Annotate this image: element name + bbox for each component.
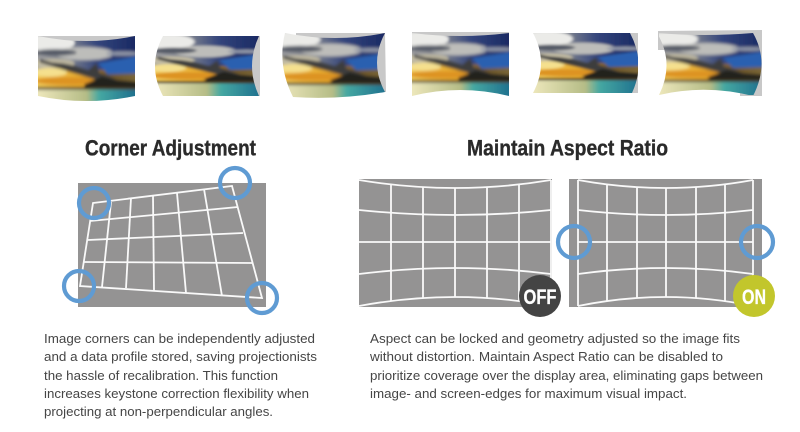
thumbnail: pincushion with bulge — [282, 33, 386, 98]
text: maintain aspect ratio description: Aspect can be locked and geometry adjusted so the image fits — [370, 331, 741, 346]
thumbnail: side curve — [155, 36, 260, 96]
text: corner adjustment description — [44, 331, 318, 419]
text: corner adjustment description: projecting at non-perpendicular angles. — [44, 404, 273, 419]
text: maintain aspect ratio description: prioritize coverage over the display area, eliminating gaps between — [370, 368, 763, 383]
text: corner adjustment description: the hassle of recalibration. This function — [44, 368, 278, 383]
panel: aspect ratio on diagram — [558, 179, 775, 317]
thumbnail: warped — [658, 30, 762, 96]
thumbnail: bottom arch — [412, 32, 509, 96]
panel: aspect ratio off diagram — [359, 179, 561, 317]
text: maintain aspect ratio description: without distortion. Maintain Aspect Ratio can be disabled to — [369, 349, 723, 364]
panel: image thumbnails — [38, 30, 762, 101]
corner handles — [64, 168, 277, 313]
curved grid — [359, 180, 551, 306]
OFF badge — [519, 275, 561, 317]
text: corner adjustment description: and a data profile stored, saving projectionists — [44, 349, 318, 364]
thumbnail: top and bottom curve — [38, 36, 135, 101]
text: corner adjustment description: increases keystone correction flexibility when — [44, 386, 309, 401]
heading: Corner Adjustment: Corner Adjustment — [85, 136, 256, 160]
side handles — [558, 226, 773, 258]
heading: Maintain Aspect Ratio: Maintain Aspect Ratio — [467, 136, 668, 160]
OFF badge: OFF — [524, 286, 557, 309]
panel: corner adjustment diagram — [64, 168, 277, 313]
text: maintain aspect ratio description — [369, 331, 763, 401]
curved grid — [578, 180, 753, 306]
ON badge: ON — [742, 286, 766, 309]
thumbnail: left concave — [533, 33, 638, 93]
warped grid — [80, 186, 262, 298]
ON badge — [733, 275, 775, 317]
text: maintain aspect ratio description: image- and screen-edges for maximum visual impact. — [370, 386, 687, 401]
text: corner adjustment description: Image corners can be independently adjusted — [44, 331, 315, 346]
